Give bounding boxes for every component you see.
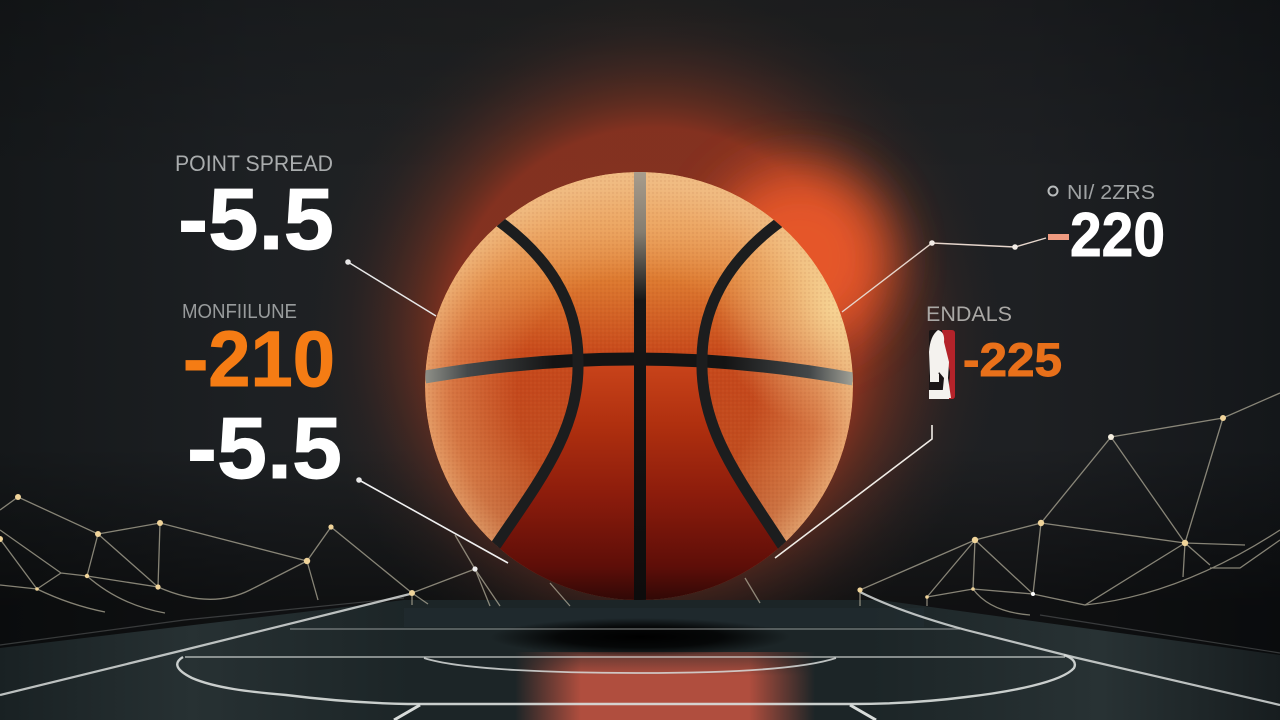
- value: spread bottom: -5.5: [187, 400, 342, 497]
- label: evals: ENDALS: [926, 303, 1012, 326]
- left network graph: [0, 494, 570, 613]
- ball leather base: [425, 172, 853, 600]
- value: evals: -225: [963, 333, 1062, 386]
- orange glow behind ball: [310, 0, 1000, 680]
- basketball: [425, 172, 853, 600]
- court floor: [0, 600, 1280, 720]
- value: moneyline: -210: [183, 314, 335, 403]
- label: moneyline: MONFIILUNE: [182, 301, 297, 323]
- value: totals: 220: [1070, 201, 1165, 270]
- right network graph: [745, 393, 1280, 615]
- value: spread top: -5.5: [178, 171, 334, 268]
- callout line: totals: [842, 234, 1069, 312]
- ball lower centre panel: [499, 366, 781, 600]
- label: point spread: POINT SPREAD: [175, 151, 333, 176]
- icon: league logo: [929, 330, 955, 399]
- ball seams: [425, 165, 853, 610]
- callout line: point spread: [345, 259, 436, 316]
- callout line: lower spread: [356, 477, 508, 563]
- callout line: lower right: [775, 425, 932, 558]
- label: totals: NI/ 2ZRS: [1067, 182, 1155, 204]
- court lines: [0, 592, 1280, 720]
